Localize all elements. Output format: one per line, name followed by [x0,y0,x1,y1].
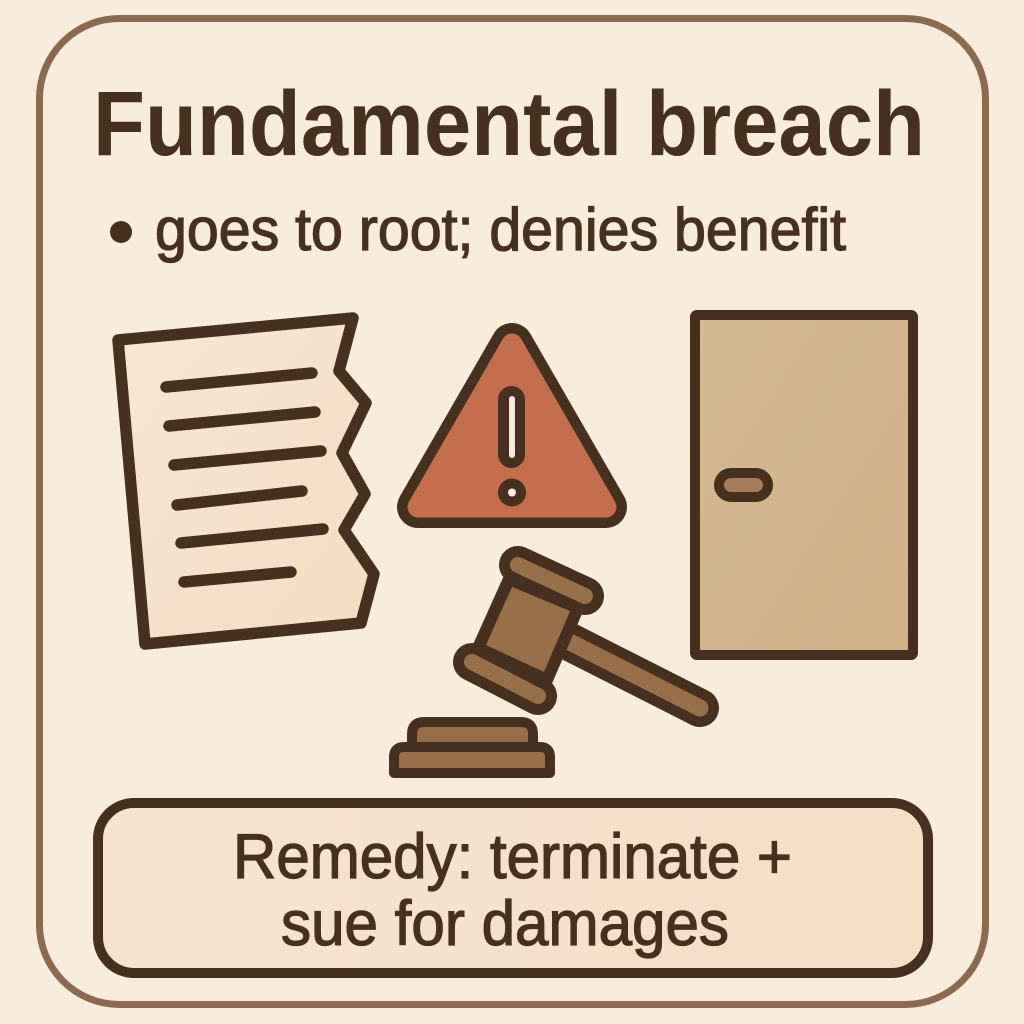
icon: door [695,315,913,655]
icon: warning triangle [418,344,606,507]
bullet text block: goes to root; denies benefit [155,196,846,263]
title: Fundamental breach [93,73,925,175]
callout: remedy: Remedy: terminate + [233,822,792,892]
icon: torn contract [118,318,374,644]
callout: remedy [98,803,928,973]
icon: gavel sound block [394,722,550,773]
callout: remedy: sue for damages [281,889,729,959]
icon: gavel [472,565,700,708]
